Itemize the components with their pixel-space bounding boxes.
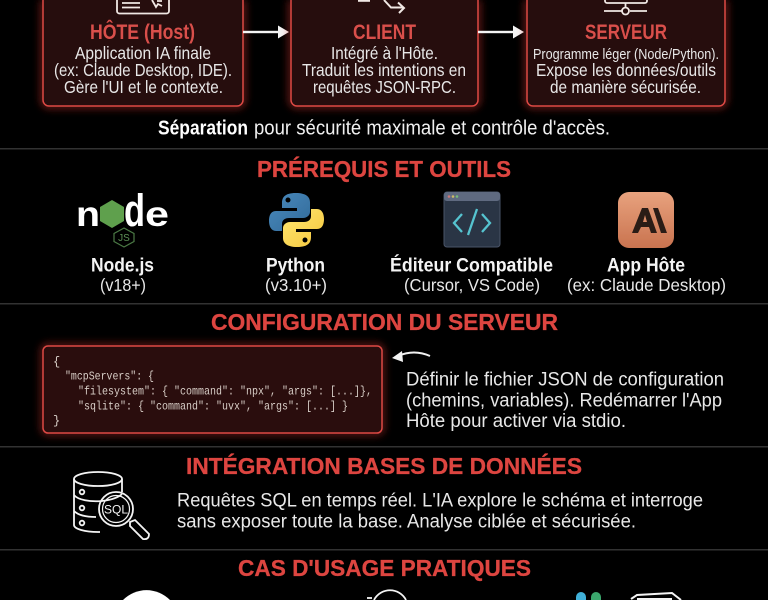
icon: node.js: n (76, 195, 100, 234)
label: python (265, 254, 327, 295)
text: server description: Programme léger (Node/Python). (533, 46, 719, 63)
icon: app host (618, 192, 674, 248)
text: separation note: Séparation (158, 118, 248, 140)
icon: sql database: SQL (104, 502, 128, 516)
label: python: Python (266, 254, 325, 276)
arrow: client to server (478, 26, 524, 38)
panel: code block (43, 346, 382, 433)
icon: python (269, 193, 324, 247)
label: editor: (Cursor, VS Code) (404, 275, 540, 295)
label: python: (v3.10+) (265, 275, 327, 295)
text: server description: de manière sécurisée. (550, 77, 701, 97)
heading: client: CLIENT (353, 21, 416, 44)
text: host description: Gère l'UI et le contexte. (64, 77, 223, 97)
text: database description (177, 490, 703, 532)
label: app host (567, 254, 726, 295)
label: app host: (ex: Claude Desktop) (567, 275, 726, 295)
label: editor: Éditeur Compatible (390, 254, 553, 276)
icon: use case one (123, 590, 170, 600)
panel: code block: { (53, 355, 60, 369)
heading: database integration: INTÉGRATION BASES DE DONNÉES (186, 452, 582, 479)
text: database description: sans exposer toute la base. Analyse ciblée et sécurisée. (177, 512, 636, 532)
icon: host window (117, 0, 169, 14)
text: configuration description: Hôte pour activer via stdio. (406, 411, 626, 432)
label: editor (390, 254, 553, 295)
text: client description (302, 43, 466, 97)
arrow: curved to code (392, 351, 430, 362)
text: client description: requêtes JSON-RPC. (313, 77, 456, 97)
text: client description: Intégré à l'Hôte. (331, 43, 438, 63)
heading: host: HÔTE (Host) (90, 20, 195, 44)
heading: use cases: CAS D'USAGE PRATIQUES (238, 555, 531, 581)
icon: node.js (76, 185, 169, 247)
text: configuration description: (chemins, variables). Redémarrer l'App (406, 390, 722, 412)
icon: use case three (576, 592, 601, 600)
icon: server (604, 0, 647, 14)
text: host description: (ex: Claude Desktop, IDE). (54, 60, 232, 80)
arrow: host to client (243, 26, 289, 38)
text: client description: Traduit les intentions en (302, 60, 466, 80)
icon: node.js: e (145, 195, 169, 234)
text: database description: Requêtes SQL en temps réel. L'IA explore le schéma et interroge (177, 490, 703, 512)
icon: client arrows (358, 0, 404, 13)
text: host description: Application IA finale (75, 43, 211, 63)
label: node.js: Node.js (91, 254, 154, 276)
panel: code block: } (53, 414, 60, 428)
text: separation note: pour sécurité maximale et contrôle d'accès. (254, 118, 610, 140)
panel: server (527, 0, 725, 106)
icon: sql database (74, 472, 149, 539)
text: configuration description (406, 370, 724, 432)
heading: prerequisites: PRÉREQUIS ET OUTILS (257, 155, 511, 182)
icon: use case two (367, 590, 406, 600)
panel: code block: "sqlite": { "command": "uvx", "args": [...] } (78, 400, 348, 414)
label: node.js: (v18+) (100, 275, 146, 295)
label: app host: App Hôte (607, 254, 685, 276)
panel: client (291, 0, 478, 106)
text: server description: Expose les données/outils (536, 60, 716, 80)
text: configuration description: Définir le fichier JSON de configuration (406, 370, 724, 390)
label: node.js (91, 254, 154, 295)
panel: code block: "mcpServers": { (65, 370, 154, 384)
icon: use case four (631, 593, 681, 600)
icon: node.js: JS (118, 233, 130, 244)
text: server description (533, 46, 719, 97)
panel: host (43, 0, 243, 106)
heading: configuration: CONFIGURATION DU SERVEUR (211, 309, 558, 335)
icon: node.js: d (124, 185, 145, 236)
panel: code block: "filesystem": { "command": "npx", "args": [...]}, (78, 384, 372, 398)
icon: editor (444, 192, 500, 247)
heading: server: SERVEUR (585, 21, 667, 44)
text: host description (54, 43, 232, 97)
